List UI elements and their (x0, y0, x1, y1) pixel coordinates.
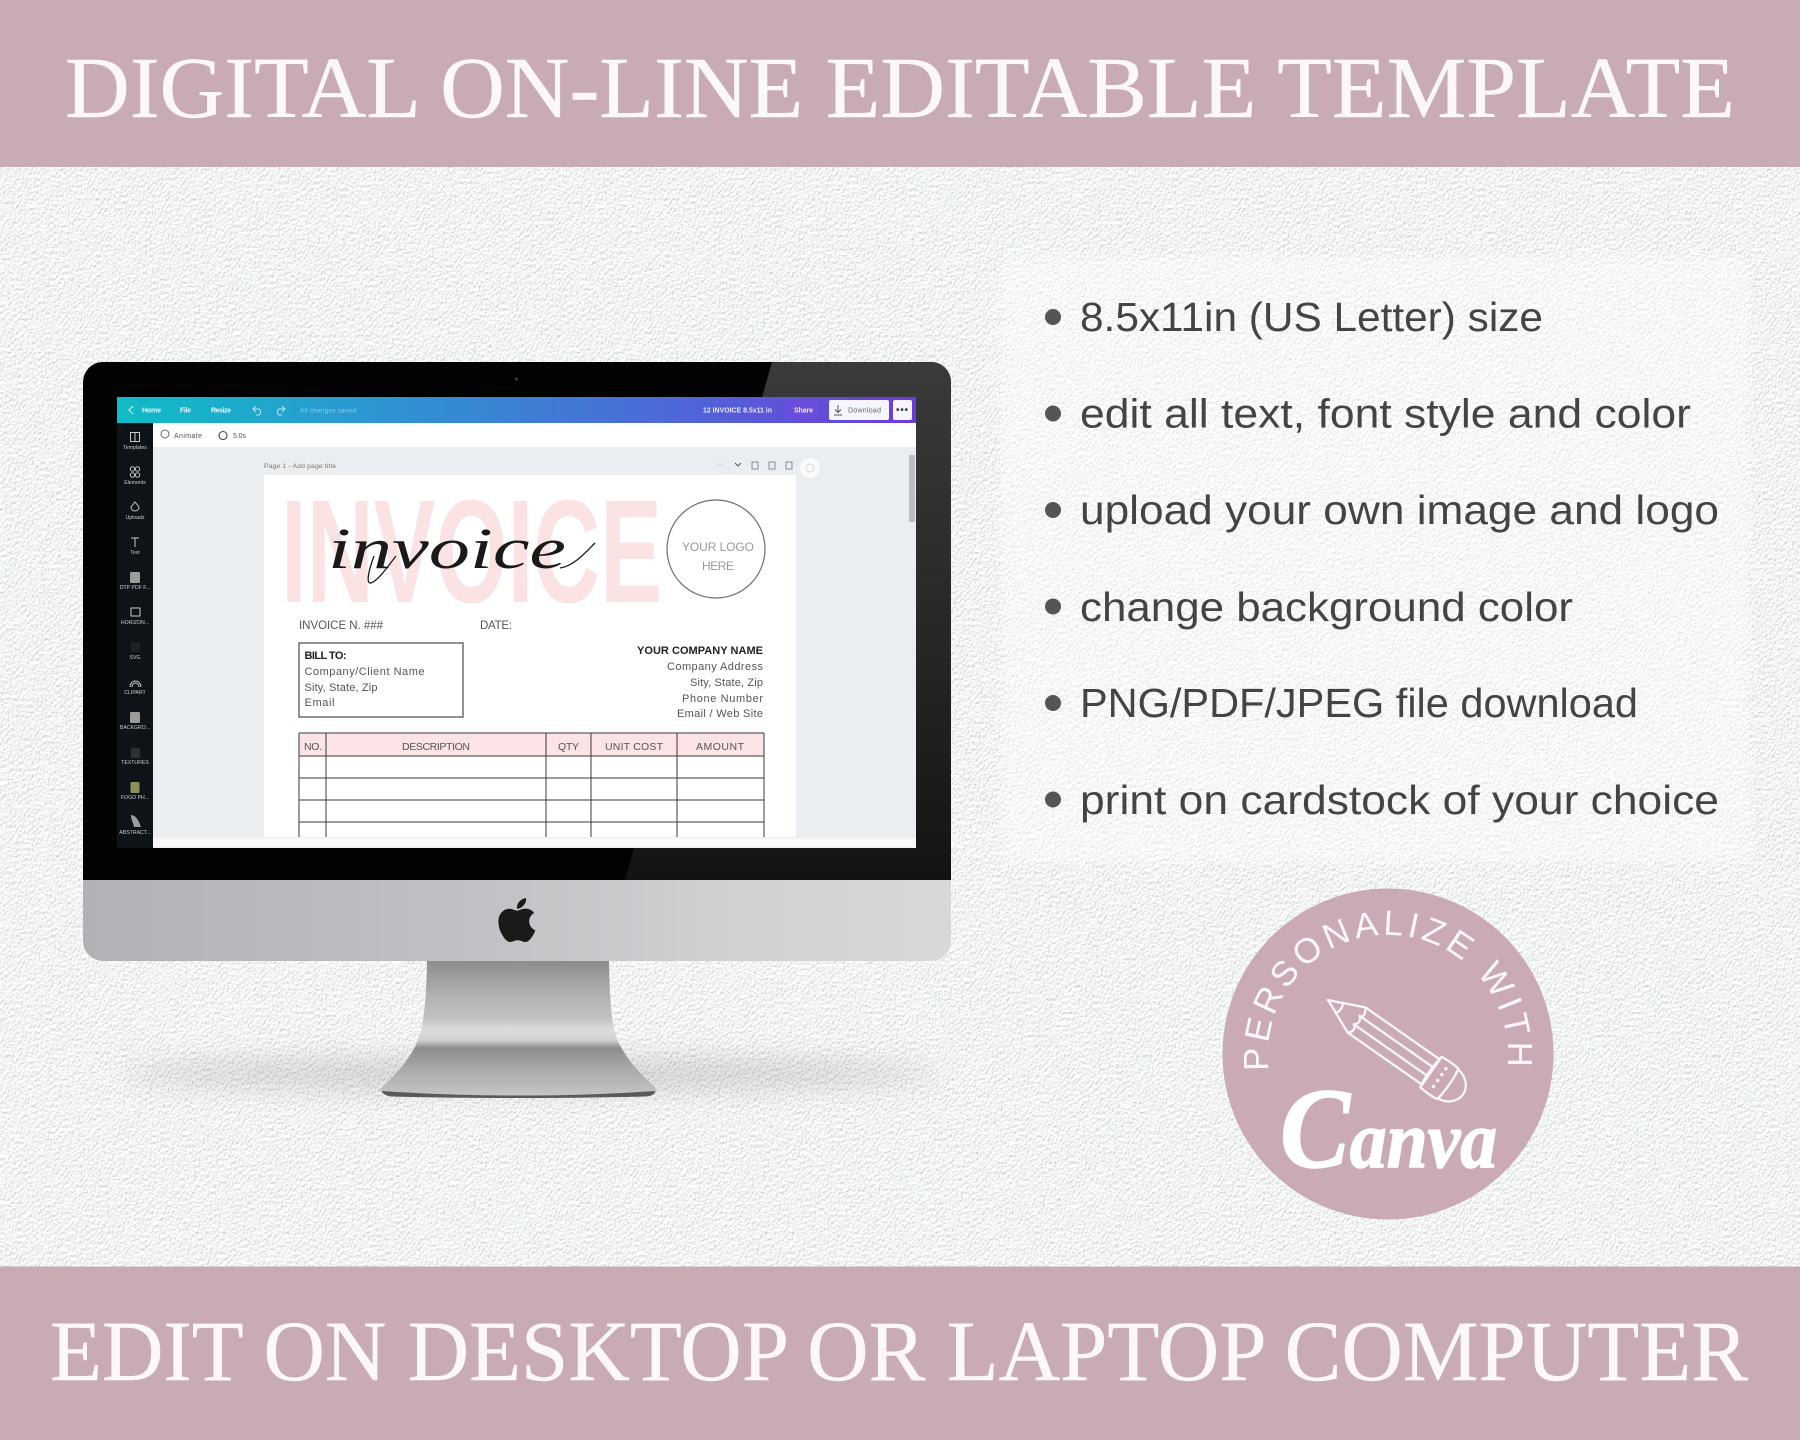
page controls (717, 462, 792, 469)
monitor stand (381, 961, 656, 1098)
panel: translucent feature list backing (1003, 258, 1748, 861)
editor top bar: Share (794, 408, 813, 414)
editor top bar: 12 INVOICE 8.5x11 in (703, 408, 772, 414)
editor sidebar: CLIPART (124, 690, 147, 696)
company details: Sity, State, Zip (690, 677, 763, 689)
line item table (299, 733, 764, 837)
monitor chin (83, 880, 951, 961)
feature 1: 8.5x11in (US Letter) size (1080, 294, 1543, 340)
editor sidebar: FOGO PH... (121, 795, 149, 801)
feature 2: edit all text, font style and color (1080, 390, 1691, 436)
logo placeholder: HERE (702, 559, 734, 573)
bill to box: Company/Client Name (304, 666, 424, 678)
feature 5: PNG/PDF/JPEG file download (1080, 680, 1638, 726)
editor sub toolbar: 5.0s (233, 433, 246, 440)
line item table: UNIT COST (605, 741, 664, 753)
script invoice word (328, 516, 595, 583)
editor top bar: ••• (896, 405, 908, 416)
header banner (0, 0, 1800, 167)
page label: Page 1 - Add page title (264, 463, 336, 470)
invoice meta (299, 620, 512, 632)
footer heading: EDIT ON DESKTOP OR LAPTOP COMPUTER (50, 1303, 1749, 1399)
editor sidebar: TEXTURES (121, 760, 149, 766)
editor sidebar: Elements (124, 480, 146, 486)
editor top bar (117, 397, 916, 423)
monitor (83, 362, 951, 961)
invoice page (264, 470, 796, 837)
editor top bar: Download (848, 408, 881, 414)
logo placeholder: YOUR LOGO (682, 540, 754, 554)
logo placeholder (667, 500, 765, 598)
editor sidebar: BACKGRO... (120, 725, 150, 731)
company details: Company Address (667, 661, 764, 673)
editor sidebar (117, 423, 153, 848)
badge Canva wordmark: Canva (1280, 1065, 1497, 1192)
editor sub toolbar (153, 423, 916, 447)
screen: Canva editor (117, 397, 916, 848)
company details (637, 645, 764, 720)
editor sidebar: Templates (123, 445, 147, 451)
feature 6: print on cardstock of your choice (1080, 777, 1719, 823)
monitor bezel (83, 362, 951, 880)
company details: Email / Web Site (677, 708, 763, 720)
camera (515, 377, 518, 381)
editor sidebar: Text (130, 550, 140, 556)
company details: Phone Number (682, 693, 763, 705)
editor sub toolbar: Animate (174, 433, 202, 440)
icon: pencil (1317, 984, 1474, 1110)
editor top bar: Resize (211, 408, 231, 414)
bottom status strip (153, 838, 916, 847)
bill to box: Sity, State, Zip (304, 682, 378, 694)
line item table: QTY (558, 741, 579, 753)
feature list (1045, 294, 1719, 823)
icon: apple logo (498, 898, 535, 942)
comment button (800, 458, 820, 478)
bill to box: Email (304, 697, 334, 709)
scrollbar (909, 455, 915, 522)
bill to box: BILL TO: (304, 650, 346, 662)
badge curved text: PERSONALIZE WITH (1244, 910, 1532, 1068)
bill to box (299, 643, 463, 717)
editor sidebar: Uploads (125, 515, 145, 521)
editor sidebar: SVG (130, 655, 140, 661)
company details: YOUR COMPANY NAME (637, 645, 763, 657)
monitor shadow (120, 1058, 940, 1090)
title: DIGITAL ON-LINE EDITABLE TEMPLATE (65, 39, 1735, 136)
editor sidebar: ABSTRACT... (119, 830, 151, 836)
editor sidebar: DTP PDF F... (120, 585, 150, 591)
large pink INVOICE word: INVOICE (281, 470, 662, 634)
script invoice word: invoice (328, 516, 566, 581)
invoice meta: INVOICE N. ### (299, 620, 384, 632)
feature 3: upload your own image and logo (1080, 487, 1719, 533)
feature 4: change background color (1080, 584, 1573, 630)
footer banner (0, 1266, 1800, 1440)
badge: personalize with Canva (1222, 888, 1554, 1220)
line item table: NO. (304, 741, 322, 753)
editor top bar: Home (142, 408, 161, 414)
editor top bar: File (180, 408, 191, 414)
editor top bar: All changes saved (300, 408, 356, 414)
editor sidebar: HORIZON... (121, 620, 149, 626)
line item table: DESCRIPTION (402, 741, 470, 753)
line item table: AMOUNT (696, 741, 745, 753)
invoice meta: DATE: (480, 620, 512, 632)
